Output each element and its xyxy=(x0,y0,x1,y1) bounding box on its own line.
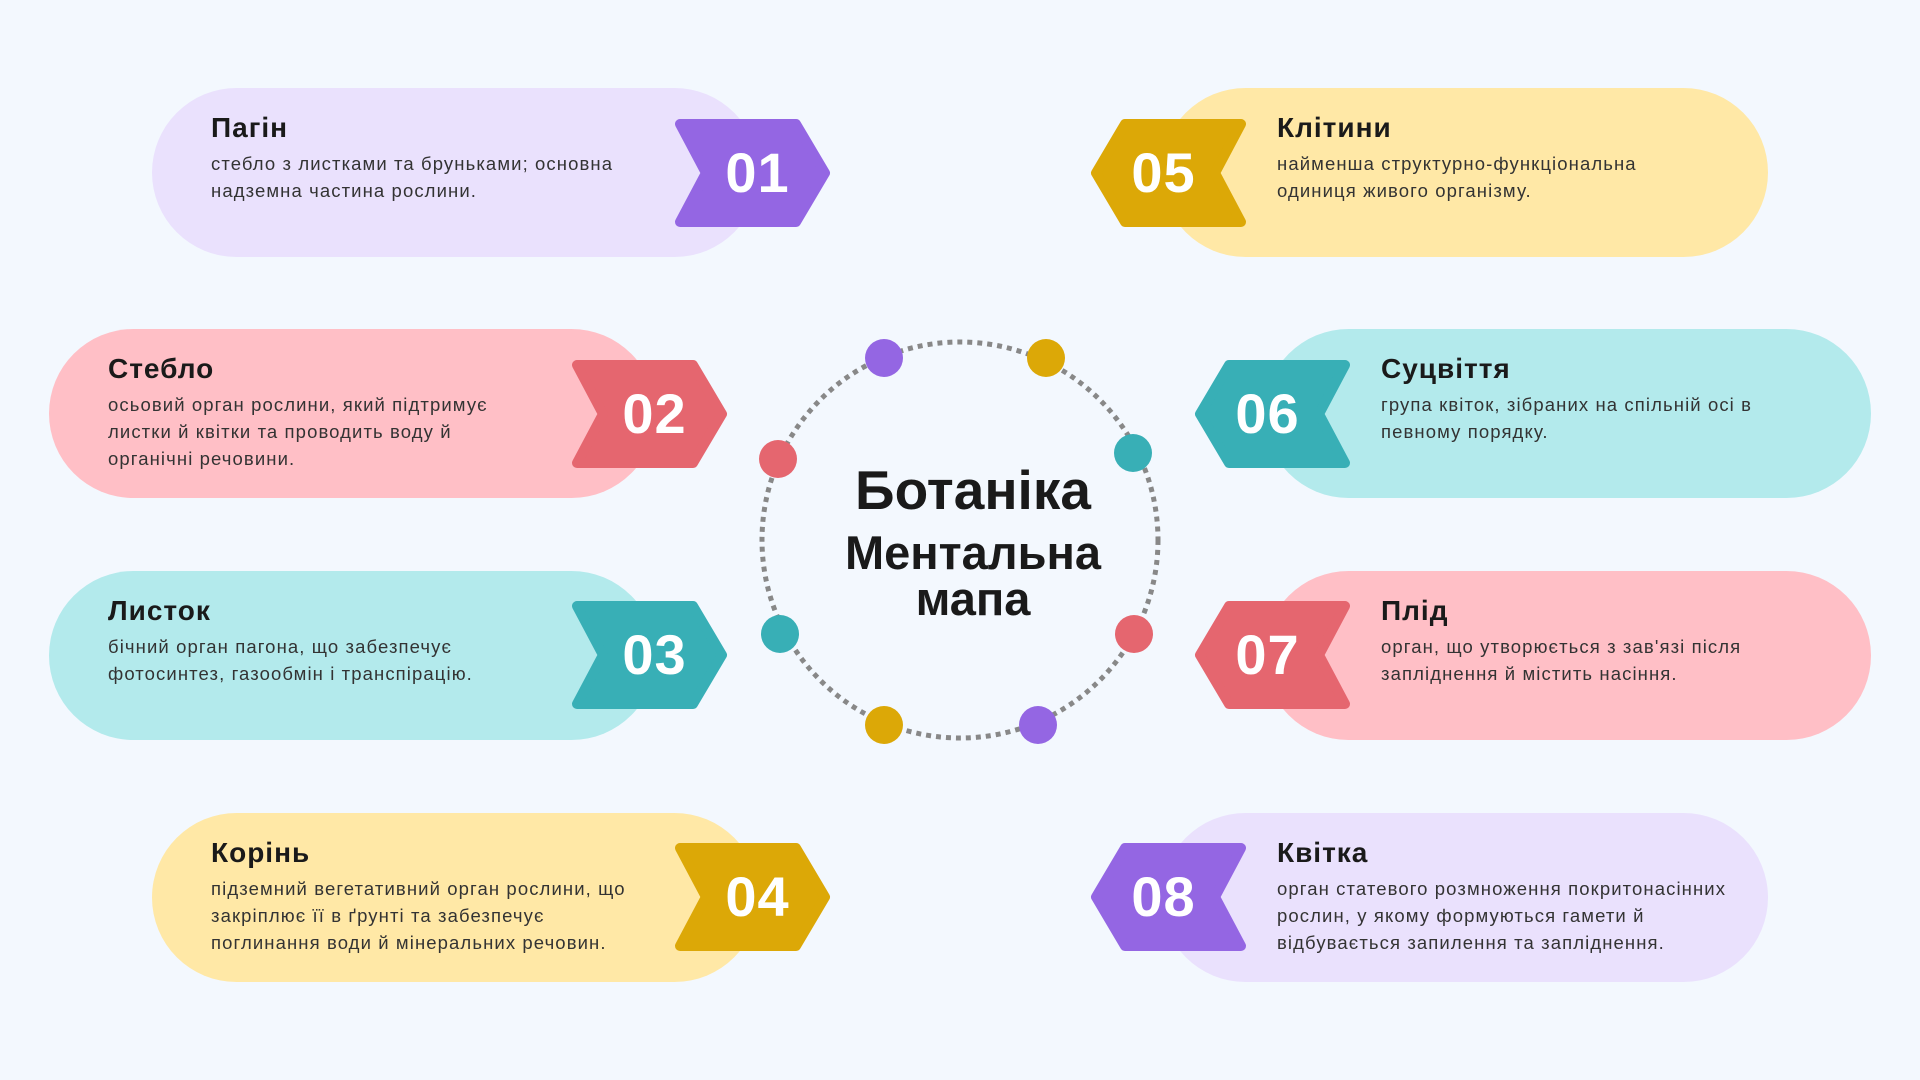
panel 07: Плід xyxy=(1264,571,1871,740)
badge 04: 04 xyxy=(725,865,790,928)
heading: Пагін: Пагін xyxy=(211,112,288,143)
text: Стебло description: органічні речовини. xyxy=(108,448,295,469)
text: Листок description xyxy=(108,636,473,684)
dot red xyxy=(759,440,797,478)
dot gold xyxy=(1027,339,1065,377)
dot purple xyxy=(1019,706,1057,744)
dot red xyxy=(1115,615,1153,653)
text: Квітка description xyxy=(1277,878,1726,953)
badge 03: 03 xyxy=(622,623,687,686)
panel 05: Клітини xyxy=(1161,88,1768,257)
badge 02 xyxy=(572,360,728,468)
text: Плід description: орган, що утворюється з зав'язі після xyxy=(1381,636,1741,657)
text: Стебло description: листки й квітки та проводить воду й xyxy=(108,421,452,442)
text: Суцвіття description: певному порядку. xyxy=(1381,421,1549,442)
heading: Листок: Листок xyxy=(108,595,211,626)
text: Стебло description xyxy=(108,394,488,469)
badge 07 xyxy=(1194,601,1350,709)
dot teal xyxy=(761,615,799,653)
heading: Корінь: Корінь xyxy=(211,837,310,868)
text: Пагін description: стебло з листками та бруньками; основна xyxy=(211,153,613,174)
badge 08: 08 xyxy=(1131,865,1196,928)
text: Корінь description xyxy=(211,878,626,953)
badge 04 xyxy=(675,843,830,951)
text: Суцвіття description xyxy=(1381,394,1752,442)
dot purple xyxy=(865,339,903,377)
badge 03 xyxy=(572,601,728,709)
text: Корінь description: підземний вегетативний орган рослини, що xyxy=(211,878,626,899)
badge 02: 02 xyxy=(622,382,687,445)
text: Квітка description: відбувається запилення та запліднення. xyxy=(1277,932,1665,953)
panel 04: Корінь xyxy=(152,813,759,982)
center title: Ботаніка xyxy=(855,459,1091,521)
text: Плід description: запліднення й містить насіння. xyxy=(1381,663,1678,684)
text: Корінь description: закріплює її в ґрунті та забезпечує xyxy=(211,905,545,926)
heading: Суцвіття: Суцвіття xyxy=(1381,353,1511,384)
text: Клітини description xyxy=(1277,153,1637,201)
badge 05 xyxy=(1090,119,1246,227)
text: Плід description xyxy=(1381,636,1741,684)
text: Корінь description: поглинання води й мінеральних речовин. xyxy=(211,932,607,953)
heading: Квітка: Квітка xyxy=(1277,837,1368,868)
badge 05: 05 xyxy=(1131,141,1196,204)
text: Квітка description: рослин, у якому формуються гамети й xyxy=(1277,905,1645,926)
panel 06: Суцвіття xyxy=(1264,329,1871,498)
center title: Ментальна xyxy=(845,526,1101,579)
center title xyxy=(845,459,1102,625)
heading: Клітини: Клітини xyxy=(1277,112,1392,143)
panel 02: Стебло xyxy=(49,329,656,498)
panel 03: Листок xyxy=(49,571,656,740)
badge 06 xyxy=(1194,360,1350,468)
text: Листок description: бічний орган пагона, що забезпечує xyxy=(108,636,452,657)
text: Суцвіття description: група квіток, зібраних на спільній осі в xyxy=(1381,394,1752,415)
text: Стебло description: осьовий орган рослини, який підтримує xyxy=(108,394,488,415)
center title: мапа xyxy=(916,572,1030,625)
heading: Стебло: Стебло xyxy=(108,353,214,384)
text: Пагін description xyxy=(211,153,613,201)
text: Клітини description: одиниця живого організму. xyxy=(1277,180,1532,201)
text: Клітини description: найменша структурно-функціональна xyxy=(1277,153,1637,174)
text: Пагін description: надземна частина рослини. xyxy=(211,180,477,201)
badge 08 xyxy=(1090,843,1246,951)
text: Квітка description: орган статевого розмноження покритонасінних xyxy=(1277,878,1726,899)
badge 01: 01 xyxy=(725,141,790,204)
dot teal xyxy=(1114,434,1152,472)
dot gold xyxy=(865,706,903,744)
badge 06: 06 xyxy=(1235,382,1300,445)
center circle with dots xyxy=(759,339,1160,744)
panel 01: Пагін xyxy=(152,88,759,257)
text: Листок description: фотосинтез, газообмін і транспірацію. xyxy=(108,663,473,684)
panel 08: Квітка xyxy=(1161,813,1768,982)
badge 07: 07 xyxy=(1235,623,1300,686)
badge 01 xyxy=(675,119,830,227)
heading: Плід: Плід xyxy=(1381,595,1448,626)
